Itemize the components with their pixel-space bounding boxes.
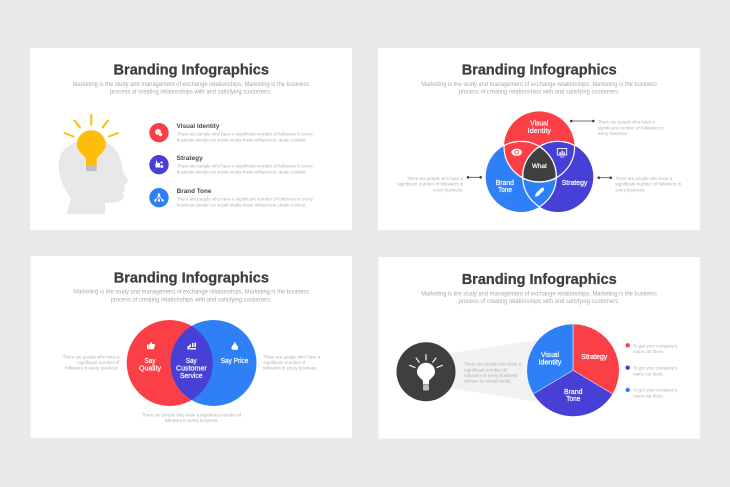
arrow: visual identity — [570, 120, 594, 122]
subtitle: process of creating relationships with and satisfying customers. — [110, 90, 272, 96]
item: brand tone: There are people who have a significant number of followers in every — [177, 197, 313, 202]
label: brand tone: Tone — [498, 187, 512, 194]
label: visual identity — [538, 352, 562, 366]
label: what: What — [532, 164, 547, 170]
icon: light bulb — [64, 115, 118, 171]
note: visual identity — [598, 120, 664, 136]
icon: pen — [535, 188, 544, 197]
note: brand tone — [397, 176, 464, 192]
legend: visual identity — [626, 388, 678, 398]
label: visual identity: Identity — [528, 128, 552, 135]
title: Branding Infographics — [462, 62, 617, 79]
label: brand tone — [564, 389, 583, 403]
item: visual identity — [149, 123, 313, 142]
label: strategy: Strategy — [581, 354, 608, 361]
item: strategy: There are people who have a significant number of followers in every — [177, 164, 313, 169]
subtitle: Marketing is the study and management of exchange relationships. Marketing is the business — [421, 292, 657, 298]
note: visual identity: There are people who have a — [598, 120, 655, 125]
label: visual identity: Identity — [538, 359, 562, 366]
item: brand tone — [149, 188, 313, 207]
arrow: brand tone — [467, 176, 482, 178]
subtitle — [421, 292, 657, 305]
subtitle — [421, 82, 657, 96]
note: left: followers in every business. — [65, 366, 119, 371]
label: strategy: Strategy — [562, 180, 588, 187]
label: brand tone: Tone — [566, 396, 580, 403]
note: cone text: There are people who have a — [464, 362, 521, 367]
item: brand tone: Brand Tone — [177, 188, 212, 195]
note: visual identity: significant number of followers in — [598, 125, 664, 130]
panel background — [30, 48, 352, 230]
item: brand tone: business domain on social media these influencers create content. — [177, 202, 307, 207]
icon: money bag — [231, 342, 238, 350]
item: visual identity: There are people who have a significant number of followers in every — [177, 132, 313, 137]
label: say customer service: Service — [180, 373, 203, 380]
legend: strategy: name out there. — [633, 349, 664, 354]
item: strategy: Strategy — [177, 155, 203, 162]
icon: dark bulb circle — [396, 342, 456, 401]
note: strategy: There are people who have a — [615, 176, 672, 181]
panel: three circle venn — [378, 48, 700, 230]
subtitle: process of creating relationships with and satisfying customers. — [459, 90, 620, 96]
subtitle: process of creating relationships with and satisfying customers. — [459, 299, 620, 305]
label: say customer service: Customer — [176, 366, 207, 372]
note: strategy — [615, 176, 682, 192]
label: visual identity: Visual — [541, 352, 559, 359]
icon: presentation chart — [557, 148, 567, 157]
note: cone text: significant number of — [464, 367, 507, 372]
label: say price: Say Price — [221, 358, 248, 365]
subtitle: Marketing is the study and management of exchange relationships. Marketing is the business — [73, 82, 309, 88]
venn diagram — [127, 320, 256, 406]
subtitle: Marketing is the study and management of exchange relationships. Marketing is the business — [73, 290, 309, 296]
panel background — [378, 48, 700, 230]
note: left — [63, 354, 120, 371]
label: say quality — [139, 358, 161, 372]
subtitle — [73, 82, 309, 96]
subtitle — [73, 290, 309, 303]
note: left: There are people who have a — [63, 354, 120, 359]
icon: thumbs up — [147, 342, 155, 349]
label: brand tone: Brand — [496, 180, 514, 187]
label: visual identity — [528, 120, 552, 135]
item: strategy — [149, 155, 313, 174]
panel: head and bulb — [30, 48, 352, 230]
title: Branding Infographics — [114, 270, 269, 287]
item: visual identity: business domain on social media these influencers create content. — [177, 137, 307, 142]
label: say customer service: Say — [186, 358, 197, 365]
note: cone text: followers in every business — [464, 373, 518, 378]
note: bottom: There are people who have a significant number of — [142, 412, 242, 417]
label: visual identity: Visual — [530, 120, 549, 128]
note: right: followers in every business. — [263, 366, 317, 371]
legend: strategy — [626, 343, 678, 354]
panel background — [378, 257, 700, 439]
note: bottom: followers in every business. — [165, 418, 218, 423]
note: strategy: significant number of followers in — [615, 182, 682, 187]
legend: brand tone: To get your company's — [633, 366, 678, 371]
note: brand tone: significant number of followers in — [397, 182, 464, 187]
note: right: significant number of — [263, 360, 306, 365]
legend: brand tone — [626, 366, 678, 376]
panel: two circle venn — [30, 256, 352, 438]
note: cone text: domain on social media. — [464, 379, 511, 384]
title: Branding Infographics — [462, 271, 617, 288]
subtitle: process of creating relationships with and satisfying customers. — [111, 297, 272, 303]
venn diagram — [486, 111, 593, 212]
label: say quality: Quality — [139, 366, 161, 372]
legend: strategy: To get your company's — [633, 344, 678, 349]
legend: visual identity: name out there. — [633, 393, 664, 398]
note: brand tone: There are people who have a — [407, 176, 464, 181]
note: brand tone: every business. — [433, 187, 463, 192]
icon: head silhouette — [59, 139, 128, 214]
panel background — [30, 256, 352, 438]
note: bottom — [142, 412, 242, 423]
note: visual identity: every business. — [598, 131, 628, 136]
note: cone text — [464, 362, 521, 384]
pie chart — [527, 324, 619, 416]
panel: pie chart — [378, 257, 700, 439]
label: say quality: Say — [144, 358, 156, 365]
note: right — [263, 354, 321, 371]
label: say customer service — [176, 358, 207, 380]
title: Branding Infographics — [114, 62, 269, 79]
gray cone — [450, 340, 537, 402]
arrow: strategy — [598, 177, 612, 179]
legend: brand tone: name out there. — [633, 371, 664, 376]
label: brand tone: Brand — [564, 389, 583, 396]
item: visual identity: Visual Identity — [177, 123, 220, 130]
subtitle: Marketing is the study and management of exchange relationships. Marketing is the business — [421, 82, 657, 88]
note: left: significant number of — [77, 360, 120, 365]
icon: eye — [511, 149, 522, 156]
icon: hands and coins — [188, 342, 196, 350]
legend: visual identity: To get your company's — [633, 388, 678, 393]
note: strategy: every business. — [615, 187, 645, 192]
note: right: There are people who have a — [263, 354, 321, 359]
label: brand tone — [496, 180, 514, 194]
item: strategy: business domain on social media these influencers create content. — [177, 169, 307, 174]
